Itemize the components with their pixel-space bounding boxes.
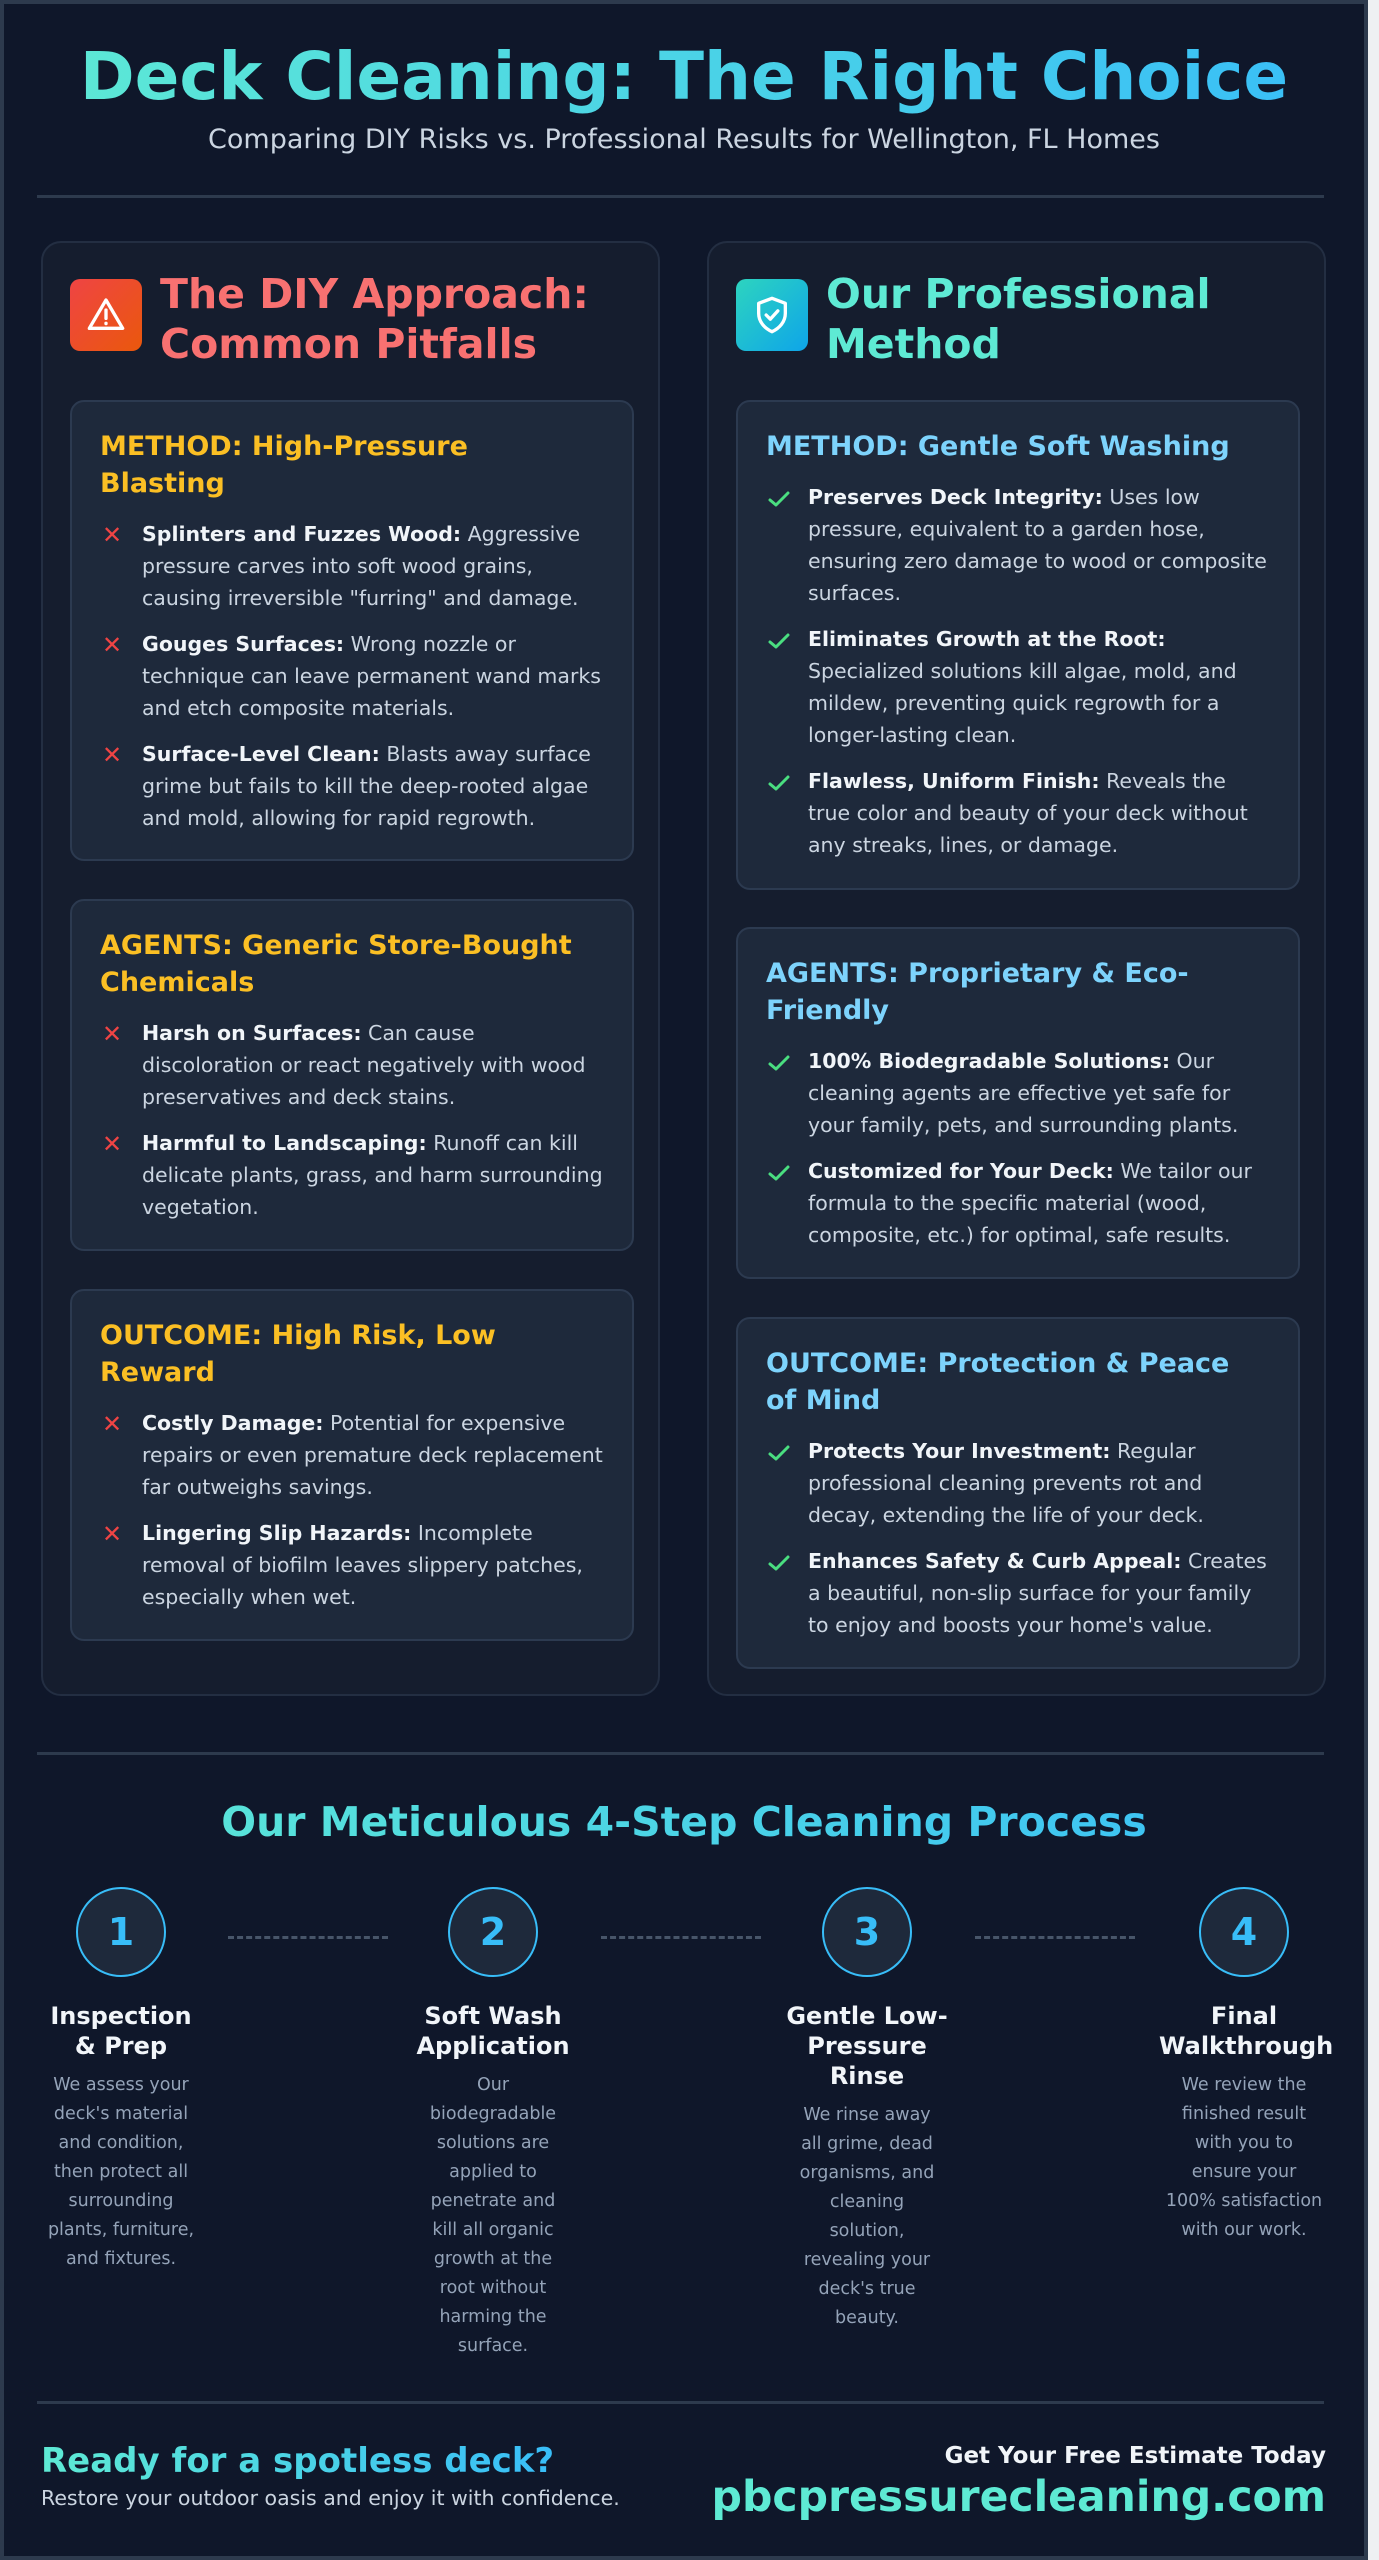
card: DIY outcome: ✕ — [102, 1520, 122, 1548]
card: pro outcome: Enhances Safety & Curb Appeal: Creates a beautiful, non-slip surface for your family to enjoy and boosts your home's value. — [808, 1549, 1267, 1637]
card: DIY agents — [70, 899, 634, 1251]
step 3: Rinse — [830, 2062, 904, 2090]
step 2: Our biodegradable solutions are applied to penetrate and kill all organic growth at the root without harming the surface. — [430, 2075, 556, 2356]
process heading: Our Meticulous 4-Step Cleaning Process — [221, 1798, 1147, 1846]
CTA left: Ready for a spotless deck? — [41, 2441, 554, 2481]
heading: DIY — [70, 270, 589, 368]
step 3 — [786, 1887, 948, 2328]
step 2: Soft Wash — [424, 2002, 562, 2030]
card: DIY method: Gouges Surfaces: Wrong nozzle or technique can leave permanent wand marks and etch composite materials. — [142, 632, 601, 720]
card: pro method: Preserves Deck Integrity: Uses low pressure, equivalent to a garden hose, ensuring zero damage to wood or composite surfaces. — [808, 485, 1267, 605]
step 4: 4 — [1231, 1910, 1257, 1954]
card: pro agents: 100% Biodegradable Solutions: Our cleaning agents are effective yet safe for your family, pets, and surrounding plants. — [808, 1049, 1238, 1137]
step 3: Pressure — [807, 2032, 927, 2060]
process heading — [0, 1794, 1368, 1850]
card: DIY method: METHOD: High-Pressure Blasting — [100, 431, 468, 499]
step 1: We assess your deck's material and condition, then protect all surrounding plants, furniture, and fixtures. — [48, 2075, 194, 2269]
step 4: Final — [1211, 2002, 1277, 2030]
card: pro method: Eliminates Growth at the Root: Specialized solutions kill algae, mold, and mildew, preventing quick regrowth for a longer-lasting clean. — [808, 627, 1237, 747]
step 4 — [1159, 1887, 1333, 2240]
panel: DIY approach — [41, 241, 660, 1696]
card: pro outcome: Protects Your Investment: Regular professional cleaning prevents rot and decay, extending the life of your deck. — [808, 1439, 1204, 1527]
card: pro method: Flawless, Uniform Finish: Reveals the true color and beauty of your deck without any streaks, lines, or damage. — [808, 769, 1248, 857]
step 1: & Prep — [75, 2032, 167, 2060]
card: pro outcome: OUTCOME: Protection & Peace of Mind — [766, 1348, 1229, 1416]
arrow: connector 3-4 — [975, 1936, 1135, 1939]
card: pro agents: AGENTS: Proprietary & Eco-Friendly — [766, 958, 1189, 1026]
step 3: We rinse away all grime, dead organisms, and cleaning solution, revealing your deck's true beauty. — [800, 2105, 934, 2328]
CTA left — [41, 2441, 620, 2510]
step 1: Inspection — [50, 2002, 192, 2030]
card: pro outcome — [736, 1317, 1300, 1669]
step 4: Walkthrough — [1159, 2032, 1333, 2060]
arrow: connector 1-2 — [228, 1936, 388, 1939]
step 3: Gentle Low- — [786, 2002, 948, 2030]
card: DIY outcome: OUTCOME: High Risk, Low Reward — [100, 1320, 496, 1388]
card: DIY outcome — [70, 1289, 634, 1641]
heading: DIY: The DIY Approach: — [160, 270, 589, 318]
card: DIY agents: ✕ — [102, 1020, 122, 1048]
panel: professional method — [707, 241, 1326, 1696]
card: pro method — [736, 400, 1300, 890]
CTA right: Get Your Free Estimate Today — [945, 2443, 1326, 2469]
arrow: connector 2-3 — [601, 1936, 761, 1939]
title: Deck Cleaning: The Right Choice — [80, 38, 1288, 115]
heading: professional: Method — [826, 320, 1001, 368]
card: DIY method — [70, 400, 634, 861]
step 4: We review the finished result with you to ensure your 100% satisfaction with our work. — [1166, 2075, 1322, 2240]
card: DIY outcome: Lingering Slip Hazards: Incomplete removal of biofilm leaves slippery patches, especially when wet. — [142, 1521, 583, 1609]
card: DIY agents: AGENTS: Generic Store-Bought Chemicals — [100, 930, 572, 998]
card: DIY agents: Harsh on Surfaces: Can cause discoloration or react negatively with wood preservatives and deck stains. — [142, 1021, 586, 1109]
heading: DIY: Common Pitfalls — [160, 320, 537, 368]
card: DIY agents: Harmful to Landscaping: Runoff can kill delicate plants, grass, and harm surrounding vegetation. — [142, 1131, 603, 1219]
card: DIY method: ✕ — [102, 741, 122, 769]
heading: professional — [736, 270, 1211, 368]
card: pro method: METHOD: Gentle Soft Washing — [766, 431, 1230, 462]
step 1: 1 — [108, 1910, 134, 1954]
step 3: 3 — [854, 1910, 880, 1954]
step 2: 2 — [480, 1910, 506, 1954]
CTA left: Restore your outdoor oasis and enjoy it with confidence. — [41, 2486, 620, 2510]
subtitle: Comparing DIY Risks vs. Professional Results for Wellington, FL Homes — [208, 124, 1160, 155]
heading: professional: Our Professional — [826, 270, 1211, 318]
card: DIY outcome: Costly Damage: Potential for expensive repairs or even premature deck replacement far outweighs savings. — [142, 1411, 603, 1499]
card: DIY method: ✕ — [102, 521, 122, 549]
step 1 — [48, 1887, 194, 2269]
step 2: Application — [416, 2032, 570, 2060]
card: DIY method: Surface-Level Clean: Blasts away surface grime but fails to kill the deep-rooted algae and mold, allowing for rapid regrowth. — [142, 742, 591, 830]
icon: shield check — [736, 279, 808, 351]
icon: warning — [70, 279, 142, 351]
step 2 — [416, 1887, 570, 2356]
card: DIY method: ✕ — [102, 631, 122, 659]
CTA right — [712, 2443, 1326, 2522]
card: pro agents — [736, 927, 1300, 1279]
CTA right: pbcpressurecleaning.com — [712, 2473, 1326, 2522]
card: DIY agents: ✕ — [102, 1130, 122, 1158]
card: DIY outcome: ✕ — [102, 1410, 122, 1438]
card: DIY method: Splinters and Fuzzes Wood: Aggressive pressure carves into soft wood grains, causing irreversible "furring" and damage. — [142, 522, 580, 610]
card: pro agents: Customized for Your Deck: We tailor our formula to the specific material (wood, composite, etc.) for optimal, safe results. — [808, 1159, 1252, 1247]
